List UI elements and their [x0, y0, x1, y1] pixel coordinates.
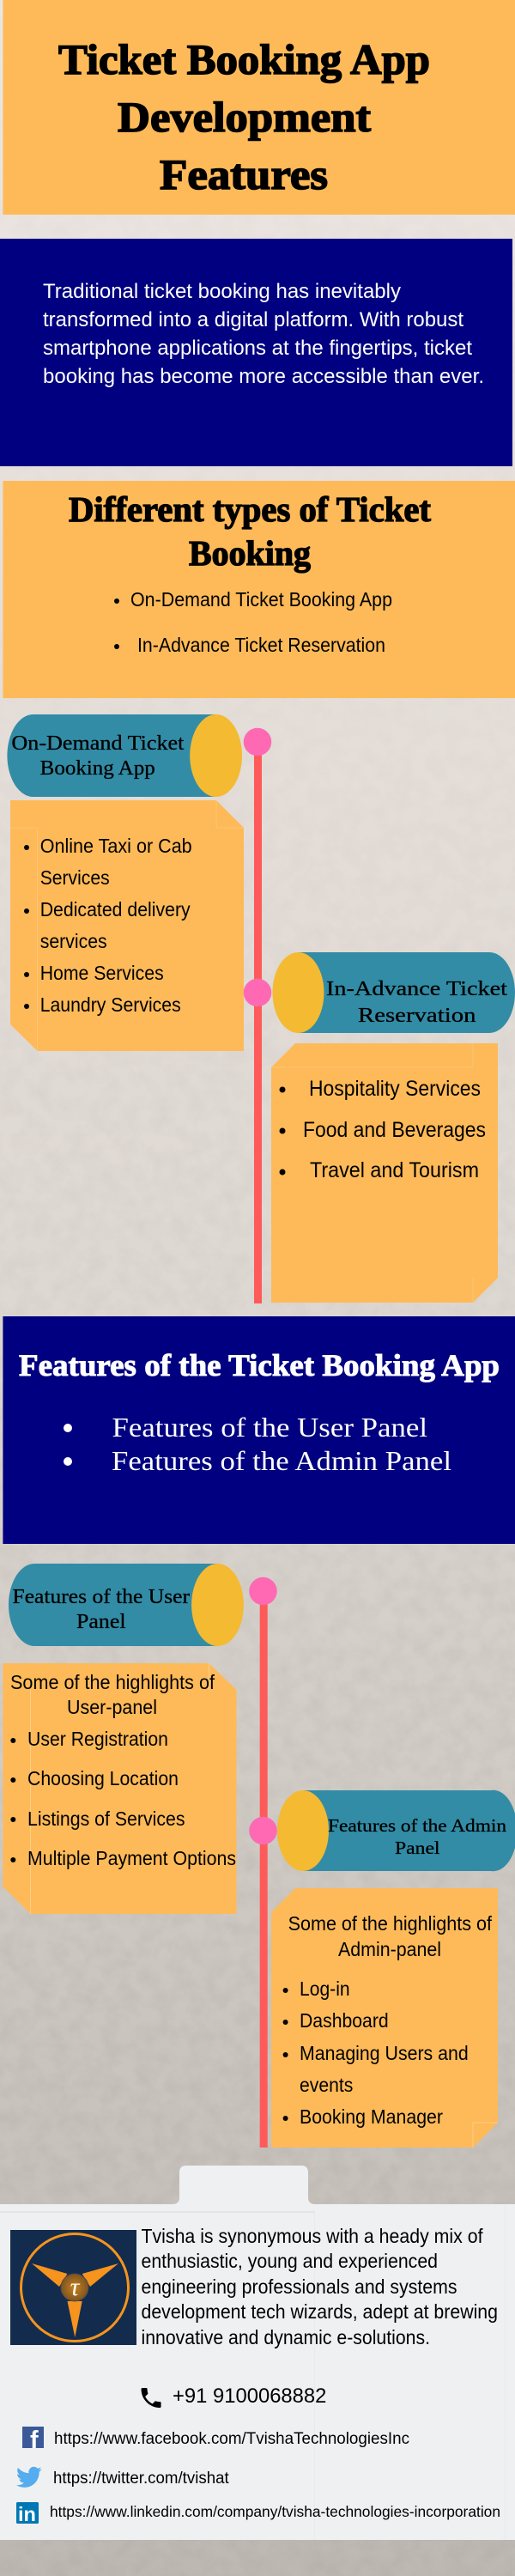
icon: facebook: [22, 2427, 44, 2454]
cylinder label: in-advance: Reservation: [358, 1005, 476, 1027]
list: on-demand services: services: [40, 930, 107, 952]
title: Features: [160, 150, 328, 198]
intro text: transformed into a digital platform. With robust: [43, 308, 464, 331]
panel: user highlights: [3, 1663, 237, 1914]
list: in-advance services: Hospitality Services: [309, 1077, 481, 1101]
timeline line 2: [260, 1591, 268, 2148]
title: Ticket Booking App: [58, 35, 430, 83]
panel: introduction: [0, 239, 512, 466]
title: Development: [118, 93, 371, 141]
list: user features: User Registration: [27, 1728, 168, 1750]
panel: admin highlights: [271, 1888, 498, 2148]
list: booking types: In-Advance Ticket Reservation: [137, 634, 385, 656]
user highlights intro: [10, 1671, 215, 1718]
list: admin features: events: [300, 2074, 353, 2096]
intro text: [43, 280, 484, 388]
panel: in-advance services: [271, 1043, 498, 1303]
company description: development tech wizards, adept at brewing: [141, 2300, 498, 2323]
list: in-advance services: Food and Beverages: [303, 1118, 486, 1142]
cylinder label: admin panel: Panel: [395, 1838, 440, 1858]
linkedin url: https://www.linkedin.com/company/tvisha-technologies-incorporation: [50, 2503, 500, 2520]
icon: facebook: f: [30, 2427, 39, 2454]
company description: innovative and dynamic e-solutions.: [141, 2326, 430, 2348]
heading: different types: Booking: [189, 533, 311, 573]
heading: features: Features of the Ticket Booking App: [19, 1348, 500, 1382]
list: on-demand services: Laundry Services: [40, 993, 181, 1016]
heading: different types: Different types of Ticket: [69, 489, 431, 529]
list: on-demand services: [24, 835, 192, 1016]
list: user features: Choosing Location: [27, 1767, 179, 1789]
intro text: booking has become more accessible than ever.: [43, 365, 484, 388]
timeline line 1: [254, 742, 262, 1303]
list: panels: Features of the User Panel: [112, 1412, 427, 1443]
cylinder label: user panel: Features of the User: [12, 1586, 190, 1608]
cylinder label: admin panel: [328, 1815, 507, 1858]
list: on-demand services: Services: [40, 866, 110, 889]
icon: linkedin: in: [18, 2503, 36, 2525]
list: on-demand services: Dedicated delivery: [40, 898, 191, 920]
cylinder label: admin panel: Features of the Admin: [328, 1815, 507, 1836]
phone number: +91 9100068882: [173, 2385, 326, 2408]
panel: different types of ticket booking: [3, 481, 515, 698]
cylinder label: user panel: Panel: [76, 1611, 126, 1633]
admin highlights intro: Some of the highlights of: [288, 1912, 493, 1935]
cylinder label: user panel: [12, 1586, 190, 1633]
list: admin features: [283, 1978, 469, 2128]
intro text: smartphone applications at the fingertips, ticket: [43, 337, 472, 360]
list: admin features: Booking Manager: [300, 2105, 443, 2128]
cylinder label: on-demand: Booking App: [40, 757, 155, 780]
list: booking types: On-Demand Ticket Booking App: [130, 588, 392, 611]
admin highlights intro: Admin-panel: [338, 1938, 441, 1960]
title panel: [3, 0, 515, 215]
heading: different types: [69, 489, 431, 573]
facebook url: https://www.facebook.com/TvishaTechnologiesInc: [54, 2430, 409, 2448]
timeline dot 1: [244, 728, 271, 756]
list: in-advance services: [280, 1077, 486, 1182]
list: user features: [10, 1728, 236, 1869]
admin highlights intro: [288, 1912, 493, 1960]
icon: tvisha logo: [10, 2230, 136, 2345]
company description: enthusiastic, young and experienced: [141, 2250, 438, 2272]
user highlights intro: Some of the highlights of: [10, 1671, 215, 1693]
list: admin features: Dashboard: [300, 2009, 389, 2032]
cylinder label: on-demand: On-Demand Ticket: [11, 732, 185, 755]
company description: Tvisha is synonymous with a heady mix of: [141, 2225, 483, 2247]
list: panels: [64, 1412, 451, 1476]
twitter url: https://twitter.com/tvishat: [53, 2470, 229, 2488]
list: user features: Listings of Services: [27, 1807, 185, 1830]
panel: features of the app: [3, 1316, 515, 1544]
list: on-demand services: Online Taxi or Cab: [40, 835, 192, 857]
icon: tvisha logo: τ: [70, 2273, 81, 2301]
footer panel: [0, 2166, 515, 2540]
list: booking types: [114, 588, 392, 656]
timeline dot 4: [249, 1817, 276, 1844]
user highlights intro: User-panel: [67, 1696, 157, 1718]
timeline dot 3: [249, 1577, 276, 1605]
title: [58, 35, 430, 198]
icon: phone: [142, 2388, 161, 2408]
panel: on-demand services: [10, 800, 244, 1051]
cylinder: in-advance: [273, 952, 515, 1033]
cylinder label: on-demand: [11, 732, 185, 780]
list: user features: Multiple Payment Options: [27, 1847, 236, 1869]
cylinder label: in-advance: In-Advance Ticket: [326, 978, 507, 1000]
cylinder: user panel: [9, 1564, 244, 1646]
list: panels: Features of the Admin Panel: [112, 1445, 451, 1476]
cylinder: on-demand: [7, 714, 242, 797]
cylinder label: in-advance: [326, 978, 507, 1027]
list: on-demand services: Home Services: [40, 962, 164, 984]
company description: [141, 2225, 498, 2348]
list: in-advance services: Travel and Tourism: [310, 1158, 479, 1182]
intro text: Traditional ticket booking has inevitably: [43, 280, 401, 303]
cylinder: admin panel: [277, 1790, 515, 1871]
timeline dot 2: [244, 979, 271, 1006]
list: admin features: Log-in: [300, 1978, 350, 2000]
company description: engineering professionals and systems: [141, 2275, 457, 2298]
icon: twitter: [16, 2467, 42, 2488]
list: admin features: Managing Users and: [300, 2042, 469, 2064]
